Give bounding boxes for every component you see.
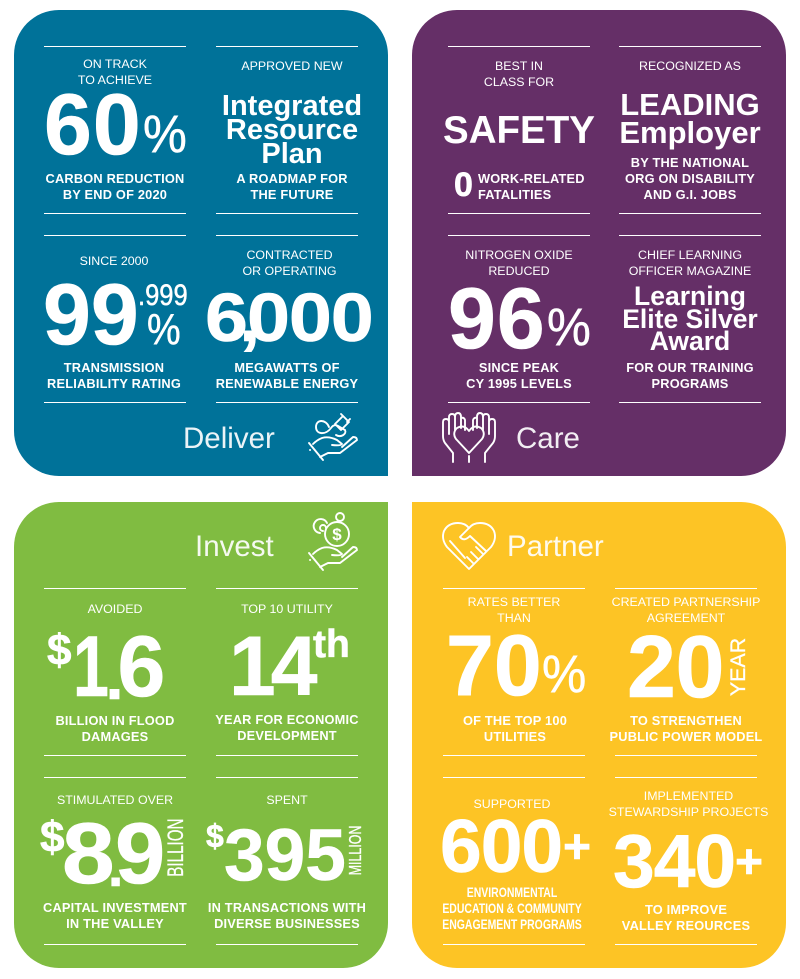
heading: integrated resource plan bbox=[222, 90, 362, 170]
number: 70: 70 bbox=[446, 618, 542, 714]
percent sign: % bbox=[542, 645, 586, 704]
number: 340: 340 bbox=[613, 818, 735, 902]
rotated label: billion: BILLION bbox=[163, 818, 188, 876]
caption: environmental education: ENGAGEMENT PROGRAMS bbox=[442, 917, 582, 932]
stat: $1.6 bbox=[44, 588, 186, 756]
dollar sign: $ bbox=[40, 812, 64, 862]
label: avoided: AVOIDED bbox=[88, 602, 142, 616]
number: 1.6 bbox=[72, 619, 165, 715]
heading: Partner: Partner bbox=[507, 530, 604, 563]
heading: leading employer: LEADING bbox=[620, 87, 760, 122]
caption: environmental education bbox=[442, 885, 582, 932]
label: contracted: OR OPERATING bbox=[242, 264, 337, 278]
stat: learning elite bbox=[619, 235, 761, 403]
icon: hand with plug bbox=[308, 413, 358, 461]
caption: since peak: SINCE PEAK bbox=[479, 360, 559, 375]
label: on track: ON TRACK bbox=[83, 57, 147, 71]
label: approved new: APPROVED NEW bbox=[241, 59, 343, 73]
heading: Care: Care bbox=[516, 422, 580, 455]
number: 395: 395 bbox=[224, 815, 346, 896]
heading: learning elite silver award: Elite Silver bbox=[622, 304, 758, 334]
caption: capital investment bbox=[43, 900, 187, 931]
caption: flood damages bbox=[55, 713, 175, 744]
label: nitrogen oxide: NITROGEN OXIDE bbox=[465, 248, 573, 262]
label: implemented bbox=[609, 789, 768, 819]
percent sign: % bbox=[143, 105, 187, 164]
heading: Deliver: Deliver bbox=[183, 422, 275, 455]
caption: carbon reduction bbox=[46, 171, 184, 202]
label: spent: SPENT bbox=[266, 793, 308, 807]
ordinal: th: th bbox=[313, 623, 350, 666]
heading: leading employer: Employer bbox=[619, 115, 761, 150]
caption: top 100: UTILITIES bbox=[484, 729, 546, 744]
caption: environmental education: ENVIRONMENTAL bbox=[467, 885, 557, 900]
decimal: .999: .999 bbox=[138, 279, 188, 312]
caption: transactions: IN TRANSACTIONS WITH bbox=[208, 900, 366, 915]
caption: economic development: DEVELOPMENT bbox=[237, 728, 337, 743]
caption: training programs: PROGRAMS bbox=[652, 376, 728, 391]
caption: valley resources: VALLEY REOURCES bbox=[622, 918, 750, 933]
caption: economic development bbox=[215, 712, 359, 743]
label: best in class: CLASS FOR bbox=[484, 75, 554, 89]
heading: leading employer bbox=[619, 87, 761, 150]
number: 8.9: 8 bbox=[62, 806, 115, 902]
panel: Partner bbox=[412, 502, 786, 968]
caption: national org: BY THE NATIONAL bbox=[631, 155, 749, 170]
stat: 340+ bbox=[615, 777, 757, 945]
number: 8.9: 9 bbox=[115, 806, 166, 902]
label: contracted: CONTRACTED bbox=[246, 248, 333, 262]
caption: reliability: TRANSMISSION bbox=[64, 360, 164, 375]
caption: since peak: CY 1995 LEVELS bbox=[466, 376, 572, 391]
caption: reliability bbox=[47, 360, 181, 391]
number: 1.6: 6 bbox=[118, 619, 165, 715]
stat: leading employer bbox=[619, 46, 761, 214]
caption: top 100 bbox=[463, 713, 567, 744]
caption: carbon reduction: BY END OF 2020 bbox=[63, 187, 167, 202]
number: 1.6: 1 bbox=[72, 619, 108, 715]
number: 8.9 bbox=[62, 806, 166, 902]
caption: national org bbox=[625, 155, 755, 202]
label: rates better: THAN bbox=[497, 611, 531, 625]
caption: transactions bbox=[208, 900, 366, 931]
label: stimulated: STIMULATED OVER bbox=[57, 793, 173, 807]
heading: integrated resource plan: Resource bbox=[226, 114, 358, 146]
label: implemented: STEWARDSHIP PROJECTS bbox=[609, 805, 768, 819]
number: 0: 0 bbox=[454, 166, 473, 204]
icon: hand with coins: $ bbox=[332, 525, 342, 544]
icon: hand with coins bbox=[308, 512, 358, 571]
caption: national org: AND G.I. JOBS bbox=[644, 187, 736, 202]
stat: 60% carbon reduction bbox=[44, 46, 186, 214]
stat: 14th bbox=[216, 588, 358, 756]
caption: economic development: YEAR FOR ECONOMIC bbox=[215, 712, 359, 727]
stat: 70% bbox=[443, 588, 585, 756]
panel: Deliver bbox=[14, 10, 388, 476]
number: 600: 600 bbox=[440, 804, 562, 888]
percent sign: % bbox=[147, 305, 181, 354]
caption: public power: PUBLIC POWER MODEL bbox=[610, 729, 762, 744]
stat: 600+ bbox=[443, 777, 585, 945]
label: nitrogen oxide: REDUCED bbox=[488, 264, 550, 278]
stat: 96% bbox=[448, 235, 590, 403]
label: best in class bbox=[484, 59, 554, 89]
label: best in class: BEST IN bbox=[495, 59, 543, 73]
label: chief learning: CHIEF LEARNING bbox=[638, 248, 742, 262]
caption: training programs: FOR OUR TRAINING bbox=[626, 360, 754, 375]
stat: 99.999% bbox=[44, 235, 186, 403]
caption: valley resources: TO IMPROVE bbox=[645, 902, 727, 917]
caption: flood damages: BILLION IN FLOOD bbox=[55, 713, 175, 728]
percent sign: % bbox=[547, 298, 591, 357]
caption: top 100: OF THE TOP 100 bbox=[463, 713, 567, 728]
heading: learning elite silver award bbox=[622, 281, 758, 356]
label: created partnership: AGREEMENT bbox=[647, 611, 725, 625]
number: 8.9: . bbox=[108, 836, 123, 898]
label: chief learning: OFFICER MAGAZINE bbox=[629, 264, 751, 278]
caption: megawatts: MEGAWATTS OF bbox=[234, 360, 340, 375]
number: 99: 99 bbox=[43, 267, 139, 363]
caption: national org: ORG ON DISABILITY bbox=[625, 171, 755, 186]
label: chief learning bbox=[629, 248, 751, 278]
caption: megawatts bbox=[216, 360, 358, 391]
caption: training programs bbox=[626, 360, 754, 391]
label: rates better bbox=[468, 595, 560, 625]
caption: capital investment: CAPITAL INVESTMENT bbox=[43, 900, 187, 915]
label: rates better: RATES BETTER bbox=[468, 595, 560, 609]
stat: $395 million bbox=[216, 777, 358, 945]
caption: fatalities: FATALITIES bbox=[478, 187, 551, 202]
caption: environmental education: EDUCATION & COMMUNITY bbox=[442, 901, 582, 916]
caption: roadmap bbox=[236, 171, 348, 202]
plus sign: + bbox=[735, 836, 763, 888]
number: 60: 60 bbox=[44, 76, 142, 172]
dollar sign: $ bbox=[47, 626, 71, 674]
stat: 6,000 megawatts bbox=[216, 235, 358, 403]
caption: flood damages: DAMAGES bbox=[82, 729, 148, 744]
label: nitrogen oxide bbox=[465, 248, 573, 278]
heading: integrated resource plan: Integrated bbox=[222, 90, 362, 122]
caption: reliability: RELIABILITY RATING bbox=[47, 376, 181, 391]
rotated label: year: YEAR bbox=[727, 638, 750, 696]
number: 14: 14 bbox=[229, 618, 312, 712]
caption: roadmap: A ROADMAP FOR bbox=[236, 171, 348, 186]
stat: integrated resource plan bbox=[216, 46, 358, 214]
heading: learning elite silver award: Learning bbox=[634, 281, 746, 311]
heading: integrated resource plan: Plan bbox=[261, 138, 323, 170]
label: implemented: IMPLEMENTED bbox=[644, 789, 733, 803]
heading: Invest: Invest bbox=[195, 530, 274, 563]
caption: fatalities bbox=[478, 171, 585, 202]
stat: $8.9 billion bbox=[44, 777, 186, 945]
stat: 20 year bbox=[615, 588, 757, 756]
rotated label: million: MILLION bbox=[344, 825, 364, 875]
label: top 10: TOP 10 UTILITY bbox=[241, 602, 333, 616]
panel: Invest bbox=[14, 502, 388, 968]
icon: heart with handshake bbox=[442, 522, 496, 570]
dollar sign: $ bbox=[206, 818, 224, 854]
number: 96: 96 bbox=[448, 271, 546, 367]
icon: hands holding heart bbox=[442, 412, 496, 463]
label: on track bbox=[78, 57, 152, 87]
heading: learning elite silver award: Award bbox=[650, 326, 730, 356]
caption: transactions: DIVERSE BUSINESSES bbox=[214, 916, 360, 931]
panel: Care bbox=[412, 10, 786, 476]
caption: since peak bbox=[466, 360, 572, 391]
caption: carbon reduction: CARBON REDUCTION bbox=[46, 171, 184, 186]
caption: public power bbox=[610, 713, 762, 744]
label: created partnership bbox=[612, 595, 760, 625]
caption: valley resources bbox=[622, 902, 750, 933]
caption: roadmap: THE FUTURE bbox=[250, 187, 334, 202]
caption: public power: TO STRENGTHEN bbox=[630, 713, 742, 728]
number: 6,000: 6,000 bbox=[205, 279, 373, 356]
label: on track: TO ACHIEVE bbox=[78, 73, 152, 87]
heading: safety: SAFETY bbox=[443, 109, 595, 152]
label: contracted bbox=[242, 248, 337, 278]
plus sign: + bbox=[563, 820, 591, 874]
number: 1.6: . bbox=[106, 640, 124, 712]
caption: capital investment: IN THE VALLEY bbox=[66, 916, 164, 931]
stat: safety bbox=[448, 46, 590, 214]
caption: fatalities: WORK-RELATED bbox=[478, 171, 585, 186]
caption: megawatts: RENEWABLE ENERGY bbox=[216, 376, 358, 391]
label: since 2000: SINCE 2000 bbox=[80, 254, 148, 268]
label: created partnership: CREATED PARTNERSHIP bbox=[612, 595, 760, 609]
label: recognized: RECOGNIZED AS bbox=[639, 59, 741, 73]
label: supported: SUPPORTED bbox=[474, 797, 550, 811]
number: 20: 20 bbox=[627, 617, 724, 716]
